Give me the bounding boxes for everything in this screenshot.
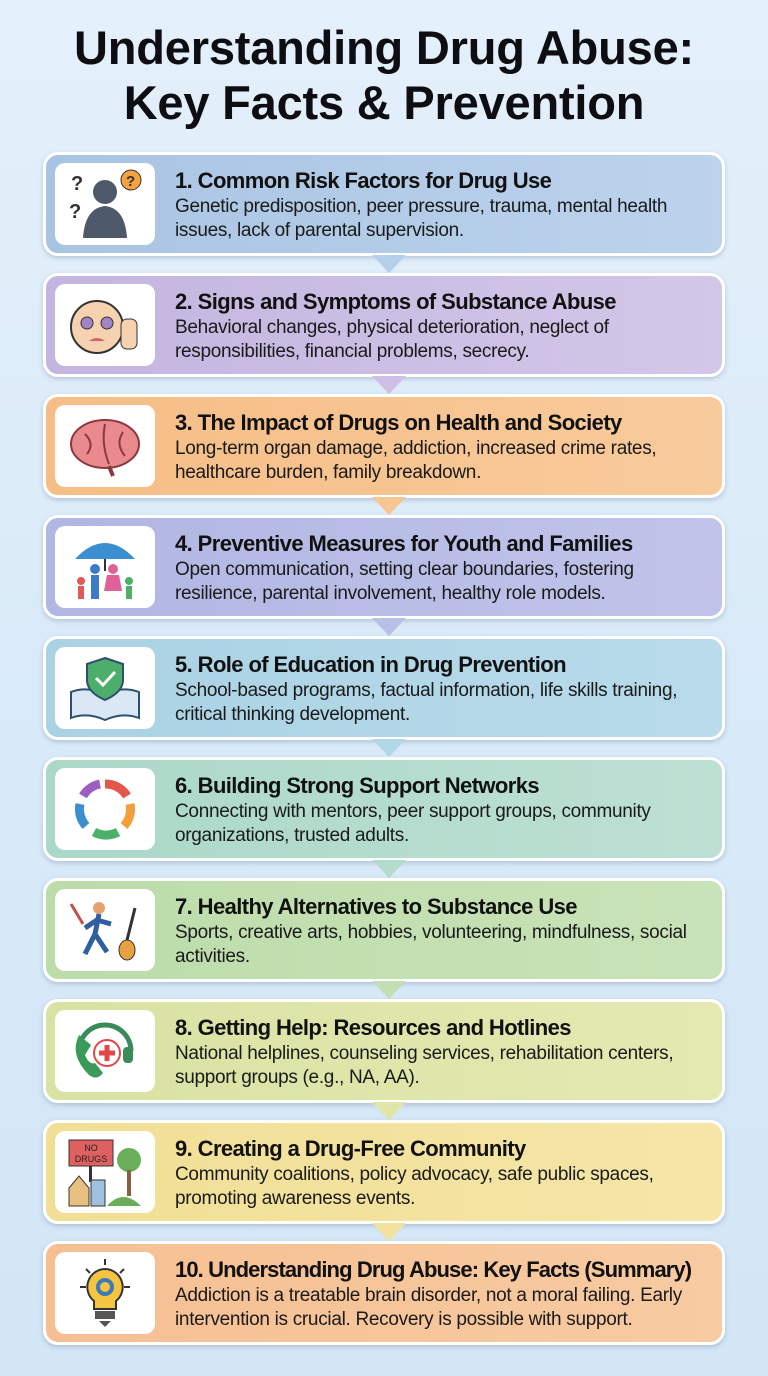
text: 6. Building Strong Support Networks	[175, 773, 539, 798]
text: 1. Common Risk Factors for Drug Use	[175, 168, 551, 193]
title	[74, 21, 694, 129]
icon: no drugs sign and town: NO	[84, 1143, 98, 1153]
icon: worried face	[55, 284, 155, 366]
icon: person with questions	[55, 163, 155, 245]
text	[175, 531, 634, 604]
text: Genetic predisposition, peer pressure, trauma, mental health issues, lack of parental supervision.	[175, 196, 667, 241]
text: Community coalitions, policy advocacy, safe public spaces, promoting awareness events.	[175, 1164, 654, 1209]
text	[175, 410, 656, 483]
arrow	[372, 497, 406, 515]
icon: book with shield	[55, 647, 155, 729]
text	[175, 289, 616, 362]
title: Understanding Drug Abuse:	[74, 21, 694, 74]
text: Behavioral changes, physical deterioration, neglect of responsibilities, financial problems, secrecy.	[175, 317, 609, 362]
title: Key Facts & Prevention	[124, 76, 644, 129]
arrow	[372, 860, 406, 878]
text	[175, 894, 687, 967]
arrow	[372, 739, 406, 757]
arrow	[372, 618, 406, 636]
panel 2: signs	[43, 273, 725, 377]
icon: runner and guitar	[55, 889, 155, 971]
text: 5. Role of Education in Drug Prevention	[175, 652, 566, 677]
icon: lightbulb with gear	[55, 1252, 155, 1334]
icon: person with questions: ?	[71, 173, 83, 195]
text: National helplines, counseling services, rehabilitation centers, support groups (e.g., NA, AA).	[175, 1043, 673, 1088]
icon: phone with headset	[55, 1010, 155, 1092]
icon: no drugs sign and town	[55, 1131, 155, 1213]
panel 5: education	[43, 636, 725, 740]
icon: circle of people	[55, 768, 155, 850]
text	[175, 1015, 673, 1088]
text: Addiction is a treatable brain disorder, not a moral failing. Early intervention is crucial. Recovery is possible with support.	[175, 1285, 682, 1330]
text	[175, 1136, 654, 1209]
panel 3: impact	[43, 394, 725, 498]
panel 8: getting help	[43, 999, 725, 1103]
text	[175, 168, 667, 241]
text: Open communication, setting clear boundaries, fostering resilience, parental involvement, healthy role models.	[175, 559, 634, 604]
icon: brain	[55, 405, 155, 487]
panel 10: summary	[43, 1241, 725, 1345]
text: 2. Signs and Symptoms of Substance Abuse	[175, 289, 616, 314]
panel 6: support networks	[43, 757, 725, 861]
text: 8. Getting Help: Resources and Hotlines	[175, 1015, 571, 1040]
icon: person with questions: ?	[69, 201, 81, 223]
text: 3. The Impact of Drugs on Health and Society	[175, 410, 622, 435]
arrow	[372, 981, 406, 999]
icon: person with questions: ?	[126, 173, 135, 190]
text	[175, 773, 651, 846]
text: 7. Healthy Alternatives to Substance Use	[175, 894, 577, 919]
arrow	[372, 1102, 406, 1120]
text	[175, 652, 677, 725]
text: School-based programs, factual information, life skills training, critical thinking development.	[175, 680, 677, 725]
icon: no drugs sign and town: DRUGS	[75, 1154, 107, 1164]
text: 9. Creating a Drug-Free Community	[175, 1136, 526, 1161]
arrow	[372, 255, 406, 273]
panel 1: risk factors	[43, 152, 725, 256]
text: Connecting with mentors, peer support groups, community organizations, trusted adults.	[175, 801, 651, 846]
text: 10. Understanding Drug Abuse: Key Facts (Summary)	[175, 1257, 691, 1282]
arrow	[372, 1223, 406, 1241]
text: Sports, creative arts, hobbies, volunteering, mindfulness, social activities.	[175, 922, 687, 967]
text: 4. Preventive Measures for Youth and Families	[175, 531, 633, 556]
panel 7: alternatives	[43, 878, 725, 982]
text: Long-term organ damage, addiction, increased crime rates, healthcare burden, family breakdown.	[175, 438, 656, 483]
panel 9: community	[43, 1120, 725, 1224]
arrow	[372, 376, 406, 394]
text	[175, 1257, 691, 1330]
icon: family umbrella	[55, 526, 155, 608]
panel 4: preventive	[43, 515, 725, 619]
